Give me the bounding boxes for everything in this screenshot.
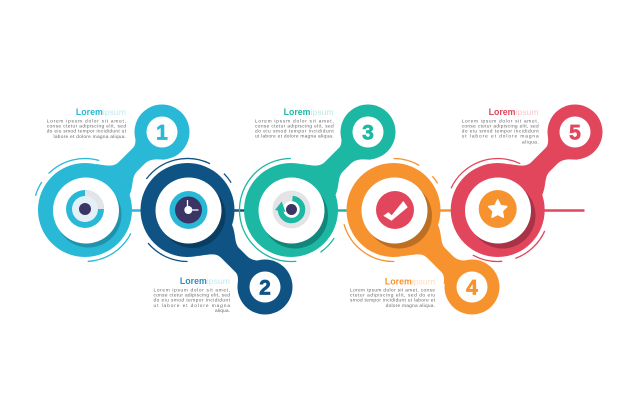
text block 2: ut labore et dolore magna	[154, 303, 230, 309]
step 3 ring and number bubble	[244, 104, 396, 257]
step 5	[429, 104, 602, 278]
text block 5: Loremipsum	[489, 107, 539, 117]
text block 1: do eiu smod tempor incididunt ut	[47, 128, 127, 134]
text block 1: labore et dolore magna aliqua.	[54, 134, 126, 140]
text block 1: conse ctetur adipiscing elit, sed	[47, 123, 126, 129]
text block 5: conse ctetur adipiscing elit, sed	[462, 123, 539, 129]
text block 3: ut labore et dolore magna aliqua.	[255, 134, 334, 140]
text block 5: do eiu smod tempor incididunt	[462, 128, 539, 134]
number 1 badge: 1	[156, 122, 168, 144]
text block 2: aliqua.	[215, 308, 230, 314]
number 4 badge	[456, 272, 488, 302]
step 4 ring and number bubble	[346, 163, 500, 314]
step 4 accent arcs	[321, 137, 466, 283]
step 1	[12, 104, 190, 283]
text block 5: aliqua.	[522, 139, 539, 145]
text block 1: Lorem ipsum dolor sit amet,	[47, 118, 126, 124]
number 2 badge	[250, 272, 280, 302]
step 1 ring and number bubble	[38, 104, 190, 257]
text block 1: Loremipsum	[76, 107, 126, 117]
text block 2: do eiu smod tempor incididunt	[154, 298, 231, 304]
number 3 badge	[352, 116, 384, 148]
text block 4: dolore magna aliqua.	[386, 303, 435, 309]
step 2 ring and number bubble	[140, 163, 292, 314]
text block 4: smod tempor incididunt ut labore et	[350, 298, 436, 304]
step 1 accent arcs	[12, 137, 158, 283]
step 2 inner disc	[156, 178, 226, 248]
icon: check mark	[376, 191, 414, 229]
text block 5	[462, 107, 539, 145]
text block 4: Lorem ipsum dolor sit amet, conse	[350, 288, 435, 294]
text block 2	[154, 276, 231, 314]
text block 1	[47, 107, 127, 140]
text block 4: ctetur adipiscing elit, sed do eiu	[350, 293, 435, 299]
icon: donut gauge	[66, 190, 104, 228]
text block 3: Lorem ipsum dolor sit amet,	[255, 118, 334, 124]
step 4 inner disc	[362, 178, 432, 248]
text block 3: Loremipsum	[284, 107, 334, 117]
text block 2: Loremipsum	[180, 276, 230, 286]
text block 5: ut labore et dolore magna	[462, 134, 539, 140]
step 2 accent arcs	[115, 137, 260, 283]
step 3 accent arcs	[220, 139, 362, 281]
text block 3	[255, 107, 334, 140]
text block 3: do eiu smod tempor incididunt	[255, 129, 334, 135]
number 5 badge	[560, 116, 590, 148]
number 5 badge: 5	[569, 122, 581, 144]
text block 4	[350, 276, 436, 309]
text block 5: Lorem ipsum dolor sit amet,	[462, 118, 539, 124]
number 1 badge	[146, 116, 178, 148]
step 4	[321, 137, 500, 314]
number 2 badge: 2	[259, 276, 271, 300]
icon: clock	[170, 191, 208, 229]
step 5 ring and number bubble	[451, 104, 602, 257]
icon: circular arrow	[272, 190, 310, 228]
step 3	[220, 104, 396, 281]
step 2	[115, 137, 292, 314]
text block 3: conse ctetur adipiscing elit, sed	[255, 123, 334, 129]
number 4 badge: 4	[466, 276, 478, 300]
text block 4: Loremipsum	[385, 276, 435, 286]
step 5 inner disc	[465, 178, 536, 248]
number 3 badge: 3	[362, 122, 374, 144]
text block 2: conse ctetur adipiscing elit, sed	[154, 293, 230, 299]
step 5 accent arcs	[429, 142, 566, 278]
step 3 inner disc	[258, 178, 328, 248]
step 1 inner disc	[53, 178, 122, 248]
connector lines between circles	[130, 209, 584, 212]
icon: star	[479, 190, 517, 228]
text block 2: Lorem ipsum dolor sit amet,	[154, 288, 230, 294]
